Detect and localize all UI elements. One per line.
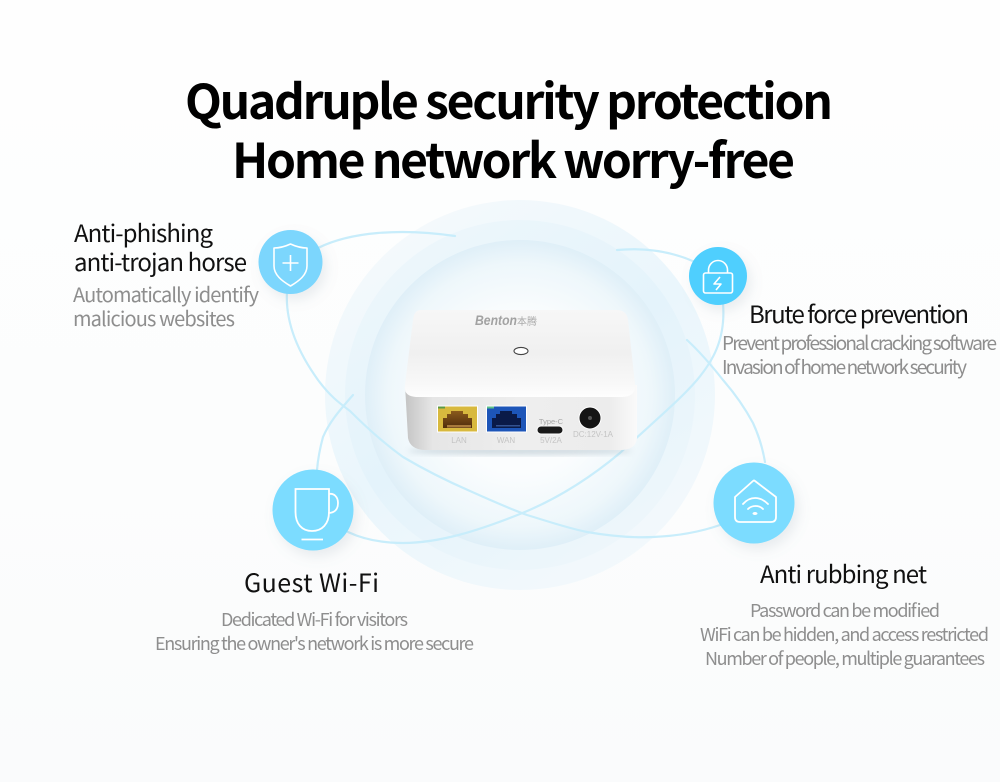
title: Home network worry-free [232, 122, 795, 192]
logo: 本腾 [517, 313, 537, 328]
WAN port: WAN [497, 436, 515, 445]
text: anti-phishing [73, 214, 260, 332]
title [185, 63, 833, 192]
text: anti rubbing net: Password can be modified [750, 597, 940, 623]
text: guest wi-fi: Dedicated Wi-Fi for visitors [221, 606, 408, 632]
router top face [405, 310, 635, 397]
router front face [405, 385, 637, 450]
text: brute force prevention: Invasion of home network security [722, 353, 967, 380]
icon: lock [689, 247, 747, 305]
text: anti-phishing: malicious websites [73, 303, 235, 332]
DC port [573, 407, 614, 439]
text: anti rubbing net: Number of people, multiple guarantees [705, 645, 985, 671]
text: anti-phishing: Anti-phishing [74, 214, 213, 249]
background glow circles [325, 200, 715, 590]
orbit lines [287, 232, 765, 543]
WAN port [486, 406, 527, 445]
DC port: DC:12V-1A [573, 430, 614, 439]
indicator light [514, 347, 528, 355]
USB-C port: 5V/2A [540, 436, 563, 445]
USB-C port: Type-C [539, 417, 564, 426]
router shadow [408, 447, 632, 455]
icon: house wifi [714, 462, 794, 544]
logo: Benton [475, 312, 517, 328]
LAN port [437, 406, 478, 445]
text: guest wi-fi: Ensuring the owner's network is more secure [155, 630, 474, 656]
text: anti rubbing net: WiFi can be hidden, and access restricted [700, 621, 989, 647]
text: guest wi-fi: Guest Wi-Fi [244, 564, 379, 600]
title: Quadruple security protection [185, 63, 833, 133]
text: anti rubbing net [700, 555, 989, 671]
text: anti-phishing: anti-trojan horse [74, 243, 247, 278]
text: guest wi-fi [155, 564, 474, 656]
text: brute force prevention: Brute force prevention [749, 295, 969, 330]
text: anti rubbing net: Anti rubbing net [760, 555, 927, 590]
text: anti-phishing: Automatically identify [73, 279, 260, 308]
icon: shield [258, 230, 322, 294]
LAN port: LAN [451, 436, 467, 445]
USB-C port [537, 417, 564, 445]
text: brute force prevention: Prevent professional cracking software [722, 329, 997, 356]
router [405, 310, 637, 455]
text: brute force prevention [722, 295, 997, 380]
icon: cup [272, 470, 354, 550]
